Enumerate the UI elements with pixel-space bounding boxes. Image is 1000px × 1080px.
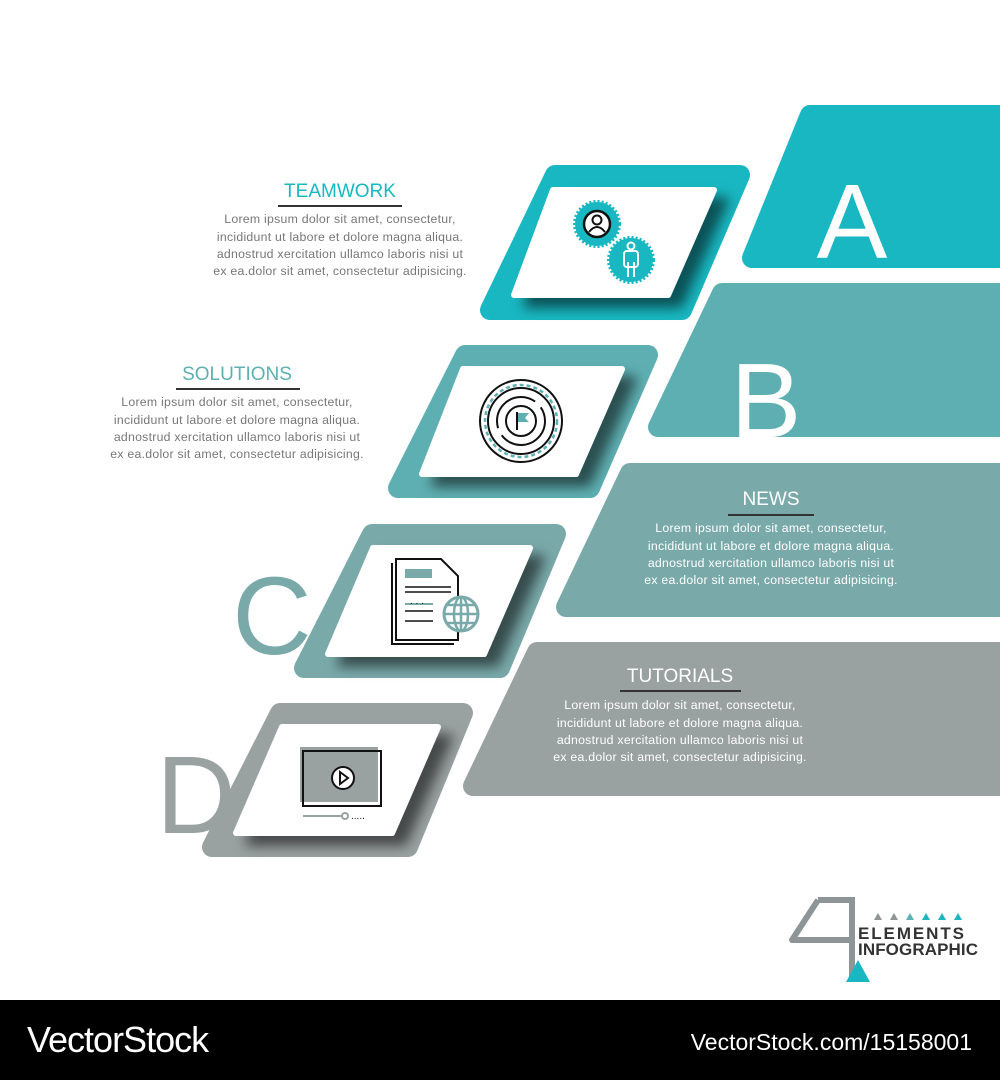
- icon: document with globe: . . .: [410, 596, 424, 607]
- frame A: [490, 175, 740, 310]
- text block: teamwork: ex ea.dolor sit amet, consectetur adipisicing.: [213, 264, 467, 278]
- text block: teamwork: adnostrud xercitation ullamco laboris nisi ut: [217, 247, 464, 261]
- bar D: tutorials: adnostrud xercitation ullamco laboris nisi ut: [557, 733, 804, 747]
- icon: video player: .....: [351, 811, 365, 822]
- text block: teamwork: TEAMWORK: [284, 181, 396, 202]
- text block: solutions: incididunt ut labore et dolore magna aliqua.: [114, 413, 360, 427]
- frame B: [398, 355, 648, 488]
- bar A: [752, 115, 1000, 281]
- text block: solutions: Lorem ipsum dolor sit amet, consectetur,: [121, 395, 353, 409]
- text block: solutions: [110, 364, 364, 461]
- frame D: [212, 713, 463, 847]
- footer bar: VectorStock.com/15158001: [691, 1029, 972, 1055]
- letter A: A: [817, 163, 888, 281]
- icon: maze: [480, 380, 562, 462]
- bar C: news: Lorem ipsum dolor sit amet, consectetur,: [655, 521, 887, 535]
- text block: teamwork: incididunt ut labore et dolore magna aliqua.: [217, 230, 463, 244]
- icon: teamwork gears: [575, 202, 653, 282]
- footer bar: [0, 1000, 1000, 1080]
- bar D: tutorials: [473, 652, 1000, 786]
- bar C: news: NEWS: [742, 489, 800, 510]
- logo: 4 elements infographic: ELEMENTS: [858, 924, 964, 943]
- text block: teamwork: [213, 181, 467, 278]
- bar C: news: [566, 473, 1000, 607]
- bar D: tutorials: TUTORIALS: [627, 666, 733, 687]
- logo: 4 elements infographic: INFOGRAPHIC: [858, 940, 978, 959]
- bar C: news: adnostrud xercitation ullamco laboris nisi ut: [648, 556, 895, 570]
- text block: solutions: adnostrud xercitation ullamco laboris nisi ut: [114, 430, 361, 444]
- text block: solutions: ex ea.dolor sit amet, consectetur adipisicing.: [110, 447, 364, 461]
- icon: document with globe: [392, 559, 478, 644]
- footer bar: VectorStock: [27, 1019, 210, 1060]
- bar C: news: incididunt ut labore et dolore magna aliqua.: [648, 539, 894, 553]
- bar D: tutorials: Lorem ipsum dolor sit amet, consectetur,: [564, 698, 796, 712]
- bar B: [658, 293, 1000, 460]
- text block: teamwork: Lorem ipsum dolor sit amet, consectetur,: [224, 212, 456, 226]
- letter B: B: [731, 342, 801, 460]
- letter D: D: [156, 734, 236, 857]
- logo: 4 elements infographic: [792, 900, 978, 982]
- bar D: tutorials: incididunt ut labore et dolore magna aliqua.: [557, 716, 803, 730]
- bar C: news: ex ea.dolor sit amet, consectetur adipisicing.: [644, 573, 898, 587]
- letter C: C: [232, 555, 312, 678]
- text block: solutions: SOLUTIONS: [182, 364, 292, 385]
- bar D: tutorials: ex ea.dolor sit amet, consectetur adipisicing.: [553, 750, 807, 764]
- frame C: [304, 534, 556, 668]
- icon: video player: [300, 747, 381, 822]
